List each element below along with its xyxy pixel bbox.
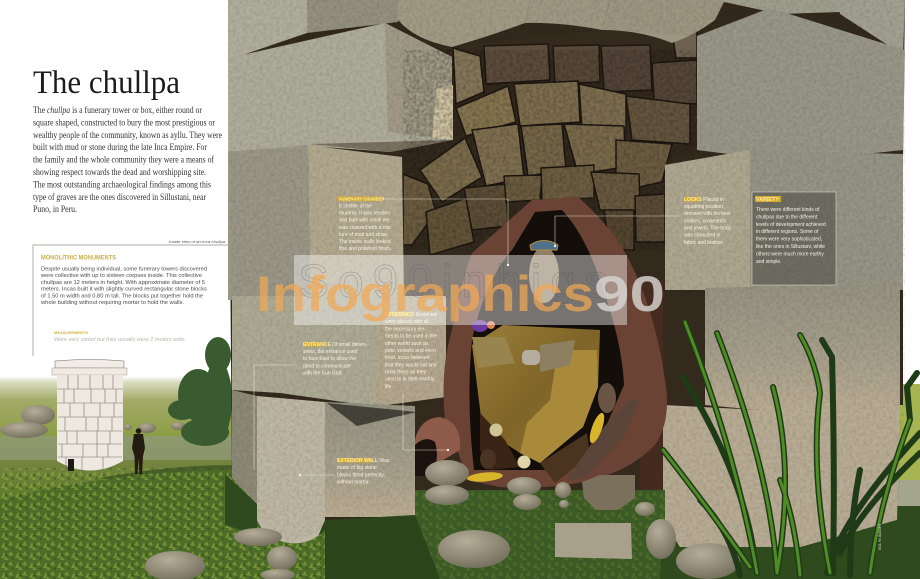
landscape background bbox=[0, 376, 920, 579]
callout: entrance: to face East to allow the bbox=[303, 356, 356, 362]
measurements note: MEASUREMENTS bbox=[54, 330, 88, 335]
foreground rocks bbox=[145, 460, 740, 579]
callout: exterior wall bbox=[337, 458, 390, 486]
callout: offerings: used to in their earthly bbox=[385, 377, 435, 383]
heading: monolithic monuments: MONOLITHIC MONUMENTS bbox=[41, 254, 116, 262]
callout: funerary chamber: and built with small ele bbox=[339, 218, 390, 224]
image caption: Inside view of an Inca chullpa bbox=[169, 239, 226, 244]
callout: offerings: other world such as bbox=[385, 341, 429, 347]
leader lines bbox=[254, 199, 680, 475]
lower textile bbox=[540, 433, 590, 483]
panel: variety: in different regions. Some of bbox=[756, 229, 819, 235]
callout: offerings: food. Incas believed bbox=[385, 355, 430, 361]
intro text: built with mud or stone during the late Inca Empire. For bbox=[33, 142, 207, 152]
monuments text: of 1.50 m width and 0.80 m tall. The blocks put together hold the bbox=[41, 293, 203, 299]
monuments text: Despite usually being individual, some funerary towers discovered bbox=[41, 266, 207, 272]
panel: variety: like the ones in Sillustani, while bbox=[756, 244, 825, 250]
callout: offerings: life. bbox=[385, 384, 393, 390]
tree bbox=[168, 337, 232, 446]
panel: variety: chullpas due to the different bbox=[756, 214, 818, 220]
callout: looks: clothes, ornaments bbox=[684, 218, 727, 224]
tower diagram bbox=[52, 360, 127, 473]
callout: funerary chamber: It shelter of the bbox=[339, 204, 372, 210]
mummy bbox=[467, 240, 640, 483]
panel: variety: There were different kinds of bbox=[756, 207, 820, 213]
title: The chullpa bbox=[33, 65, 180, 101]
panel: variety: others were much more earthy bbox=[756, 251, 824, 257]
callout: offerings bbox=[385, 312, 438, 390]
headband bbox=[530, 240, 558, 250]
callout: looks: fabric and leather. bbox=[684, 240, 724, 246]
foreground grass bbox=[0, 470, 920, 579]
callout: offerings: the necessary ele- bbox=[385, 326, 426, 332]
interior stone wall bbox=[403, 28, 697, 255]
intro text: type of graves are the ones discovered in Sillustani, near bbox=[33, 192, 206, 202]
watermark bbox=[256, 255, 665, 322]
callout: offerings: were placed with all bbox=[385, 319, 429, 325]
interior stone texture bbox=[403, 50, 697, 250]
watermark: So90inhigs bbox=[298, 255, 608, 307]
burial cavity bbox=[469, 210, 624, 470]
callout: funerary chamber: The inside walls looked bbox=[339, 239, 391, 245]
right wrap bbox=[567, 400, 640, 480]
watermark: Infographics bbox=[256, 266, 594, 322]
monuments text: chullpas are 12 meters in height. With approximate diameter of 5 bbox=[41, 280, 205, 286]
clay pot bbox=[415, 417, 460, 462]
watermark band bbox=[294, 255, 627, 325]
chullpa dark backing bbox=[228, 0, 905, 530]
stone blocks: left side bbox=[228, 0, 725, 543]
agave plant bbox=[663, 322, 920, 575]
callout: entrance: dead to communicate bbox=[303, 364, 351, 370]
measurements note: Were very varied but they usually were 2 meters wide. bbox=[54, 337, 186, 343]
head bbox=[529, 247, 559, 303]
callout: funerary chamber bbox=[338, 196, 391, 252]
callout: exterior wall: without mortar. bbox=[337, 480, 370, 486]
callout: looks: LOOKS Placed in bbox=[684, 197, 724, 203]
intro text: The most outstanding archaeological findings among this bbox=[33, 179, 211, 189]
intro text: showing respect towards the dead and worshipping site. bbox=[33, 167, 206, 177]
callout: offerings: pots, vessels and even bbox=[385, 348, 436, 354]
panel: variety: and simple. bbox=[756, 259, 782, 265]
monuments text bbox=[40, 266, 207, 306]
cloak bbox=[444, 197, 667, 488]
callout: offerings: that they would eat and bbox=[385, 362, 437, 368]
leader dots bbox=[299, 245, 556, 476]
callout: entrance: ENTRANCE Of small dimen- bbox=[303, 342, 368, 348]
callout: funerary chamber: FUNERARY CHAMBER bbox=[339, 196, 385, 202]
intro text: wealthy people of the community, known as ayllu. They were bbox=[33, 130, 222, 140]
callout: offerings: ments to be used in the bbox=[385, 334, 437, 340]
panel: variety: them were very sophisticated, bbox=[756, 237, 822, 243]
callout: exterior wall: EXTERIOR WALL Was bbox=[337, 458, 390, 464]
monuments text: meters. Incas built it with slightly curved rectangular stone blocks bbox=[41, 287, 207, 293]
callout: looks: squatting position, bbox=[684, 204, 724, 210]
intro text: the family and the whole community they were a means of bbox=[33, 155, 215, 165]
callout: looks: was shrouded in bbox=[684, 232, 721, 238]
callout: looks: and jewels. The body bbox=[684, 226, 732, 232]
callout: entrance: with the Sun God. bbox=[303, 370, 343, 376]
callout: looks: dressed with his best bbox=[684, 211, 731, 217]
callout: funerary chamber: ture of mud and straw. bbox=[339, 232, 388, 238]
callout: offerings: OFFERINGS Mummies bbox=[385, 312, 438, 318]
intro text: The chullpa is a funerary tower or box, either round or bbox=[33, 105, 202, 115]
monuments text: whole building without requiring mortar to hold the walls. bbox=[40, 300, 184, 306]
gap behind right column bbox=[640, 280, 663, 530]
stone texture overlay bbox=[228, 0, 905, 547]
panel: variety bbox=[752, 192, 836, 285]
body bbox=[472, 325, 600, 463]
callout: funerary chamber: was covered with a mix bbox=[339, 225, 391, 231]
panel: variety: levels of development achieved bbox=[756, 222, 826, 228]
callout: entrance: sions, the entrance used bbox=[303, 349, 358, 355]
stone blocks: right side bbox=[663, 0, 905, 547]
callout: entrance bbox=[303, 342, 368, 376]
callout: funerary chamber: mummy. It was residen bbox=[339, 211, 390, 217]
panel: monolithic monuments bbox=[33, 245, 230, 356]
callout: funerary chamber: fine and polished finish. bbox=[339, 246, 391, 252]
callout: exterior wall: blocks fitted perfectly, bbox=[337, 472, 385, 478]
intro text bbox=[33, 105, 222, 214]
carved stone head bbox=[582, 475, 635, 510]
panel: variety: VARIETY bbox=[756, 197, 779, 203]
intro text: square shaped, constructed to bury the most prestigious or bbox=[33, 117, 215, 127]
corn and offerings bbox=[467, 411, 607, 483]
watermark: 90 bbox=[594, 266, 665, 322]
human silhouette bbox=[132, 428, 145, 474]
callout: looks bbox=[684, 197, 732, 246]
measurements note bbox=[54, 330, 186, 343]
intro text: Puno, in Peru. bbox=[33, 204, 77, 214]
background rocks bbox=[0, 405, 185, 438]
callout: exterior wall: made of big stone bbox=[337, 465, 377, 471]
monuments text: were collective with up to sixteen corpses inside. This collective bbox=[40, 273, 202, 279]
vertical credit: SOL 90 IMAGES bbox=[878, 523, 882, 550]
callout: offerings: drink there as they bbox=[385, 370, 427, 376]
